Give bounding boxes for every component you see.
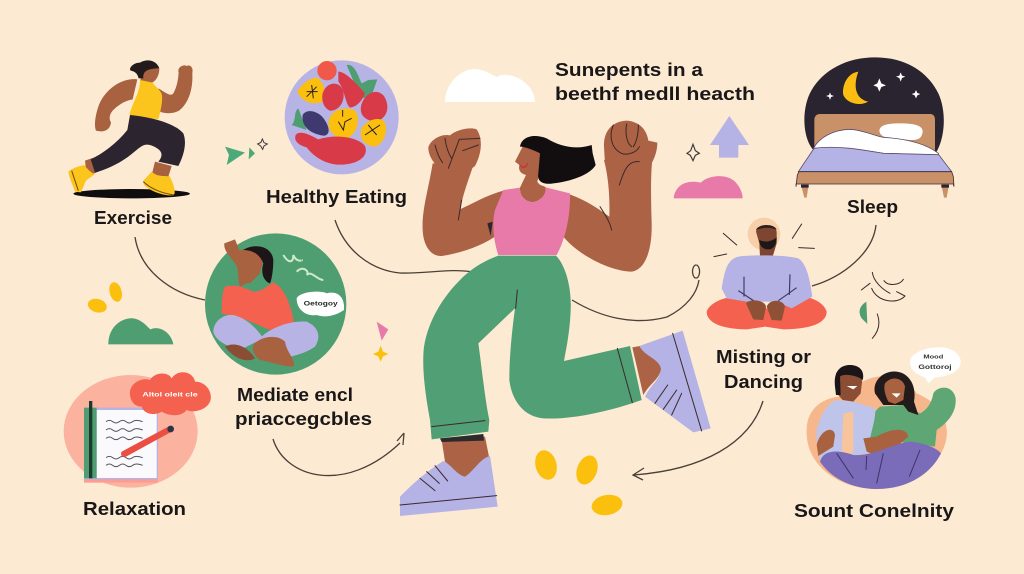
label: social connectivity: Sount Conelnity: [794, 501, 954, 521]
panel: relaxation journal: [64, 372, 211, 488]
panel: healthy eating plate: [285, 60, 399, 174]
label: misting or dancing: [716, 347, 811, 392]
panel: person in green circle: Oetogoy: [304, 300, 338, 307]
connector: exercise to meditate: [135, 237, 205, 300]
speech bubble: Mood: [923, 354, 944, 360]
icon: sparkle: [687, 144, 699, 161]
icon: yellow dots: [86, 281, 124, 315]
icon: green arrows and sparkle: [225, 139, 267, 165]
connector: sleep to meditation: [812, 225, 876, 286]
panel: social connection: [807, 347, 961, 489]
icon: lavender up arrow: [710, 116, 749, 158]
label: healthy eating: Healthy Eating: [266, 187, 407, 207]
icon: green cloud: [108, 318, 173, 344]
icon: pink triangle and star: [373, 322, 388, 362]
icon: yellow dots below figure: [532, 448, 624, 518]
speech bubble: [910, 347, 961, 383]
label: mediate: priaccegcbles: [235, 408, 372, 429]
illustration: main dancing figure: [400, 121, 711, 516]
connector: healthy eating to figure: [335, 220, 473, 273]
connector: figure to meditation: [572, 265, 700, 321]
label: relaxation: Relaxation: [83, 499, 186, 519]
label: misting or dancing: Misting or: [716, 347, 811, 367]
label: exercise: Exercise: [94, 208, 172, 228]
speech bubble: Gottoroj: [918, 365, 952, 371]
title text: beethf medll heacth: [555, 84, 755, 104]
title text: Sunepents in a: [555, 60, 704, 80]
panel: person in green circle: [205, 233, 346, 375]
icon: pink cloud: [674, 176, 743, 198]
label: mediate: [235, 384, 372, 429]
connector: mediate arrow: [273, 433, 404, 476]
icon: white cloud: [445, 69, 535, 102]
icon: scribble and leaf: [860, 272, 905, 338]
label: misting or dancing: Dancing: [724, 372, 803, 392]
title text: [555, 60, 755, 104]
panel: exercise runner: [68, 60, 193, 198]
panel: sleep and meditation: [674, 57, 954, 338]
illustration: meditating man: [707, 218, 827, 329]
panel: relaxation journal: Altol oleit cle: [142, 392, 198, 399]
illustration: bed at night: [796, 57, 954, 198]
label: mediate: Mediate encl: [237, 384, 353, 405]
label: sleep: Sleep: [847, 197, 898, 217]
arrow: dancing to center: [633, 401, 763, 480]
panel: left side meditate and relaxation: [64, 233, 388, 488]
